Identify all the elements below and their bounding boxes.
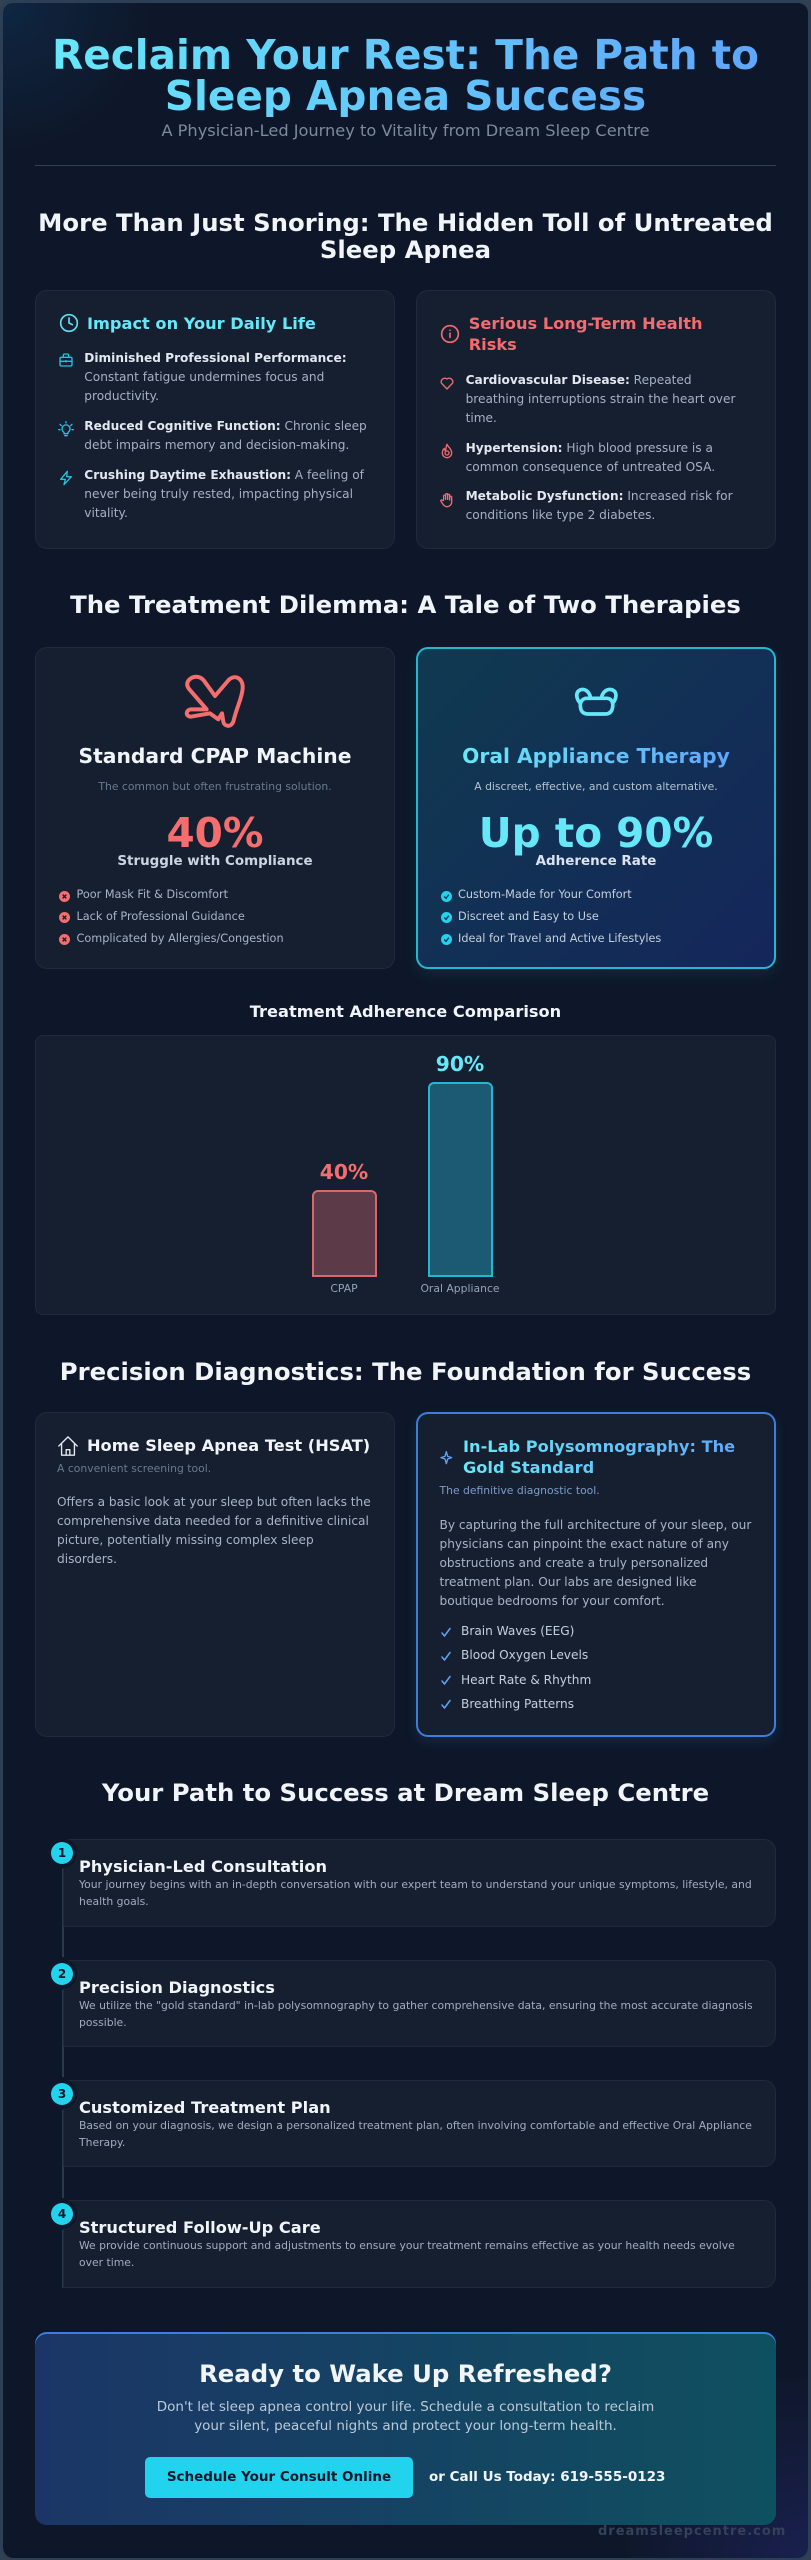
text: exhaustion: vitality. xyxy=(84,506,128,520)
icon: check xyxy=(441,1700,451,1709)
step 1 card xyxy=(63,1839,776,1927)
icon: house xyxy=(58,1436,78,1456)
heading: polysomnography xyxy=(463,1436,753,1478)
title: Sleep Apnea Success xyxy=(165,72,646,120)
step 2 text: possible. xyxy=(79,2016,127,2028)
panel: CPAP xyxy=(35,647,395,969)
step 3 card xyxy=(63,2080,776,2167)
panel: daily life impact xyxy=(35,290,395,549)
chart title: Treatment Adherence Comparison xyxy=(250,1002,561,1021)
step 3 number xyxy=(51,2083,73,2105)
text: hypertension: common consequence of untreated OSA. xyxy=(466,460,715,474)
step 4 card xyxy=(63,2200,776,2288)
step 2 card xyxy=(63,1960,776,2047)
value: CPAP: 40% xyxy=(320,1160,368,1184)
icon: briefcase xyxy=(59,353,73,367)
text: polysomnography: By capturing the full architecture of your sleep, our xyxy=(440,1518,751,1532)
text: cardiovascular xyxy=(466,373,736,425)
list item: breathing: Breathing Patterns xyxy=(461,1697,574,1711)
text: home test: picture, potentially missing complex sleep xyxy=(57,1533,314,1547)
icon: check xyxy=(441,1652,451,1661)
label: oral appliance: Oral Appliance xyxy=(420,1282,500,1295)
icon: light bulb xyxy=(58,421,74,436)
step 2 title: Precision Diagnostics xyxy=(79,1978,275,1996)
text: performance: productivity. xyxy=(84,389,159,403)
step 4 number: 4 xyxy=(58,2207,66,2221)
text: home test: comprehensive data needed for a definitive clinical xyxy=(57,1514,369,1528)
list item: allergies: Complicated by Allergies/Congestion xyxy=(76,932,284,945)
phone number: or Call Us Today: 619-555-0123 xyxy=(429,2469,665,2485)
text: cognitive: debt impairs memory and decision-making. xyxy=(84,438,349,452)
step 1 text xyxy=(79,1878,752,1908)
label: CPAP: CPAP xyxy=(330,1282,358,1295)
text: polysomnography: obstructions and create a truly personalized xyxy=(440,1556,708,1570)
list item: mask fit: Poor Mask Fit & Discomfort xyxy=(76,888,228,901)
text: hypertension: Hypertension: High blood pressure is a xyxy=(466,441,713,455)
subheading: polysomnography: The definitive diagnostic tool. xyxy=(440,1484,600,1497)
heading: hidden toll: More Than Just Snoring: The Hidden Toll of Untreated xyxy=(38,208,773,237)
subheading: CPAP: The common but often frustrating solution. xyxy=(98,780,332,793)
heading: polysomnography: Gold Standard xyxy=(463,1458,594,1477)
step 2 number xyxy=(51,1963,73,1985)
text: exhaustion xyxy=(84,468,364,520)
text: performance: Diminished Professional Performance: xyxy=(84,351,347,365)
step 4 title: Structured Follow-Up Care xyxy=(79,2218,321,2236)
text: performance xyxy=(84,351,347,403)
stat: 40%: 40% xyxy=(166,809,264,857)
icon: check xyxy=(441,891,452,902)
text: call to action: Don't let sleep apnea control your life. Schedule a consultation to reclaim xyxy=(157,2399,654,2415)
value: oral appliance: 90% xyxy=(436,1052,484,1076)
icon: x xyxy=(59,934,70,945)
step 4 text xyxy=(79,2238,735,2271)
panel: call to action xyxy=(35,2332,776,2525)
step 1 number xyxy=(51,1842,73,1864)
title: Reclaim Your Rest: The Path to xyxy=(52,30,759,78)
text: call to action: your silent, peaceful nights and protect your long-term health. xyxy=(194,2418,617,2434)
step 3 xyxy=(51,2080,776,2198)
heading: daily life: Impact on Your Daily Life xyxy=(87,314,316,333)
text: home test: disorders. xyxy=(57,1552,117,1566)
step 3 text: Therapy. xyxy=(79,2136,125,2148)
step 1 title: Physician-Led Consultation xyxy=(79,1856,327,1876)
title xyxy=(50,34,761,117)
step 3 text: Based on your diagnosis, we design a personalized treatment plan, often involving comfortable and effective Oral Appliance xyxy=(79,2119,752,2132)
button xyxy=(145,2457,413,2498)
bar chart xyxy=(35,1035,776,1315)
text: cardiovascular: Cardiovascular Disease: Repeated xyxy=(466,373,692,387)
step 4 text: We provide continuous support and adjustments to ensure your treatment remains effective as your health needs evolve xyxy=(79,2239,735,2252)
step 2 text xyxy=(79,1999,753,2028)
step 1 text: Your journey begins with an in-depth conversation with our expert team to understand your unique symptoms, lifestyle, and xyxy=(79,1878,752,1891)
list item: brain waves: Brain Waves (EEG) xyxy=(461,1624,574,1638)
icon: x xyxy=(59,891,70,902)
stat label: compliance: Struggle with Compliance xyxy=(117,854,313,869)
step 4 number xyxy=(51,2203,73,2225)
text: home test: Offers a basic look at your sleep but often lacks the xyxy=(57,1495,371,1509)
step 2 number: 2 xyxy=(58,1967,66,1981)
text: metabolic: conditions like type 2 diabetes. xyxy=(466,508,655,522)
heading: call to action: Ready to Wake Up Refreshed? xyxy=(199,2359,612,2388)
list item: discreet: Discreet and Easy to Use xyxy=(458,910,599,923)
heading: health risks: Risks xyxy=(469,335,517,354)
step 1 number: 1 xyxy=(58,1846,66,1860)
heading: polysomnography: In-Lab Polysomnography: The xyxy=(463,1437,735,1456)
step 4 text: over time. xyxy=(79,2256,134,2268)
panel: polysomnography xyxy=(416,1412,776,1737)
step 2 text: We utilize the "gold standard" in-lab polysomnography to gather comprehensive data, ensuring the most accurate diagnosis xyxy=(79,1999,753,2012)
list item: guidance: Lack of Professional Guidance xyxy=(76,910,245,923)
heading: home test: Home Sleep Apnea Test (HSAT) xyxy=(87,1436,370,1455)
text: polysomnography: treatment plan. Our labs are designed like xyxy=(440,1575,697,1589)
step 1 xyxy=(51,1839,776,1957)
heading: oral appliance: Oral Appliance Therapy xyxy=(462,744,730,768)
text: cognitive: Reduced Cognitive Function: Chronic sleep xyxy=(84,419,367,433)
icon: x xyxy=(59,912,70,923)
icon: hand xyxy=(440,493,452,508)
bar: oral appliance xyxy=(428,1082,493,1277)
subtitle: A Physician-Led Journey to Vitality from Dream Sleep Centre xyxy=(161,121,650,140)
stat label: adherence: Adherence Rate xyxy=(536,854,656,869)
text: metabolic: Metabolic Dysfunction: Increased risk for xyxy=(466,489,733,503)
text: polysomnography xyxy=(440,1518,752,1608)
text: hypertension xyxy=(466,441,715,474)
heading: health risks: Serious Long-Term Health xyxy=(469,314,702,333)
heading: diagnostics: Precision Diagnostics: The Foundation for Success xyxy=(60,1357,751,1386)
icon: info xyxy=(440,324,460,344)
heading: hidden toll xyxy=(38,208,773,264)
panel: health risks xyxy=(416,290,776,549)
text: polysomnography: boutique bedrooms for your comfort. xyxy=(440,1594,665,1608)
icon: heart xyxy=(440,378,454,390)
list item: heart rate: Heart Rate & Rhythm xyxy=(461,1673,591,1687)
heading: health risks xyxy=(469,314,702,354)
watermark: dreamsleepcentre.com xyxy=(598,2524,786,2538)
bar: CPAP xyxy=(312,1190,377,1277)
text: polysomnography: physicians can pinpoint the exact nature of any xyxy=(440,1537,729,1551)
list item: comfort: Custom-Made for Your Comfort xyxy=(458,888,632,901)
heading: CPAP: Standard CPAP Machine xyxy=(78,744,351,768)
text: cognitive xyxy=(84,419,367,452)
step 4 xyxy=(51,2200,776,2288)
text: exhaustion: never being truly rested, impacting physical xyxy=(84,487,353,501)
list item: oxygen: Blood Oxygen Levels xyxy=(461,1648,588,1662)
heading: hidden toll: Sleep Apnea xyxy=(320,235,491,264)
icon: bolt xyxy=(60,470,72,486)
icon: sparkle xyxy=(440,1451,452,1464)
icon: flame xyxy=(442,444,452,458)
text: performance: Constant fatigue undermines focus and xyxy=(84,370,324,384)
icon: check xyxy=(441,1676,451,1685)
text: exhaustion: Crushing Daytime Exhaustion: A feeling of xyxy=(84,468,364,482)
panel: home test xyxy=(35,1412,395,1737)
text: cardiovascular: time. xyxy=(466,411,497,425)
button: Schedule Your Consult Online xyxy=(167,2469,391,2485)
list item: travel: Ideal for Travel and Active Lifestyles xyxy=(458,932,661,945)
panel: oral appliance xyxy=(416,647,776,969)
step 2 xyxy=(51,1960,776,2077)
step 3 title: Customized Treatment Plan xyxy=(79,2098,331,2116)
text: home test xyxy=(57,1495,371,1566)
icon: check xyxy=(441,934,452,945)
step 1 text: health goals. xyxy=(79,1894,149,1908)
step 3 text xyxy=(78,2119,752,2148)
heading: treatment dilemma: The Treatment Dilemma: A Tale of Two Therapies xyxy=(70,590,741,619)
stat: up to 90%: Up to 90% xyxy=(479,809,713,857)
heading: path to success: Your Path to Success at Dream Sleep Centre xyxy=(102,1778,709,1807)
subheading: oral appliance: A discreet, effective, and custom alternative. xyxy=(474,780,718,793)
subheading: home test: A convenient screening tool. xyxy=(57,1462,211,1475)
icon: clock xyxy=(60,314,78,332)
text: call to action xyxy=(35,2398,776,2436)
icon: CPAP mask xyxy=(184,674,245,728)
step 3 number: 3 xyxy=(58,2087,66,2101)
icon: oral appliance xyxy=(574,688,618,716)
icon: check xyxy=(441,1628,451,1637)
icon: check xyxy=(441,912,452,923)
text: metabolic xyxy=(466,489,733,522)
text: cardiovascular: breathing interruptions strain the heart over xyxy=(466,392,735,406)
